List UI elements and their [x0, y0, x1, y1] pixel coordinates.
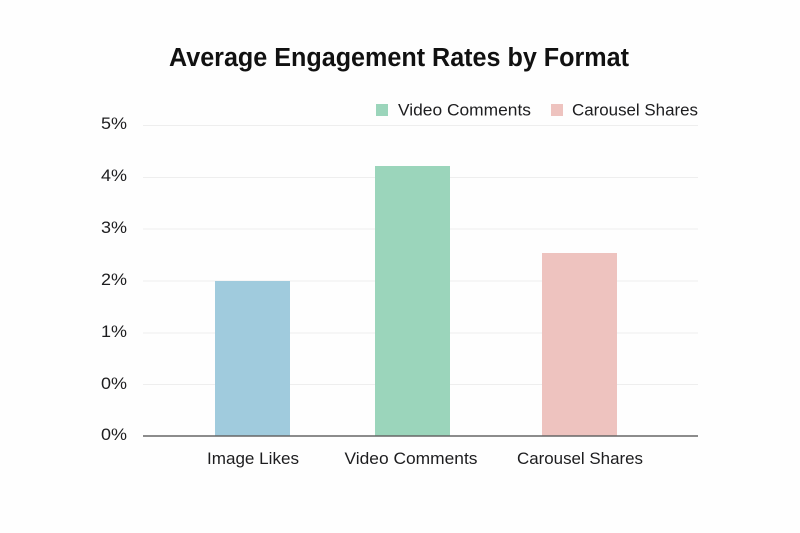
x axis labels: Carousel Shares	[517, 450, 643, 468]
y axis labels: 2%	[101, 271, 127, 289]
x axis labels: Image Likes	[207, 450, 299, 468]
title: Average Engagement Rates by Format	[169, 44, 629, 72]
bar: Video Comments	[375, 166, 450, 436]
y axis labels: 0%	[101, 426, 127, 444]
bar: Image Likes	[215, 281, 290, 436]
x axis labels: Video Comments	[344, 450, 478, 468]
y axis labels: 1%	[101, 323, 127, 341]
bar chart	[101, 115, 698, 468]
x axis line	[143, 435, 698, 437]
y axis labels: 4%	[101, 167, 127, 185]
legend item: Video Comments: Video Comments	[398, 102, 531, 120]
y axis labels: 3%	[101, 219, 127, 237]
y axis labels	[101, 115, 127, 444]
legend item: Carousel Shares: Carousel Shares	[572, 102, 698, 120]
y axis labels: 0%	[101, 375, 127, 393]
y axis labels: 5%	[101, 115, 127, 133]
x axis labels	[207, 450, 643, 468]
bar: Carousel Shares	[542, 253, 617, 436]
legend	[376, 102, 698, 120]
